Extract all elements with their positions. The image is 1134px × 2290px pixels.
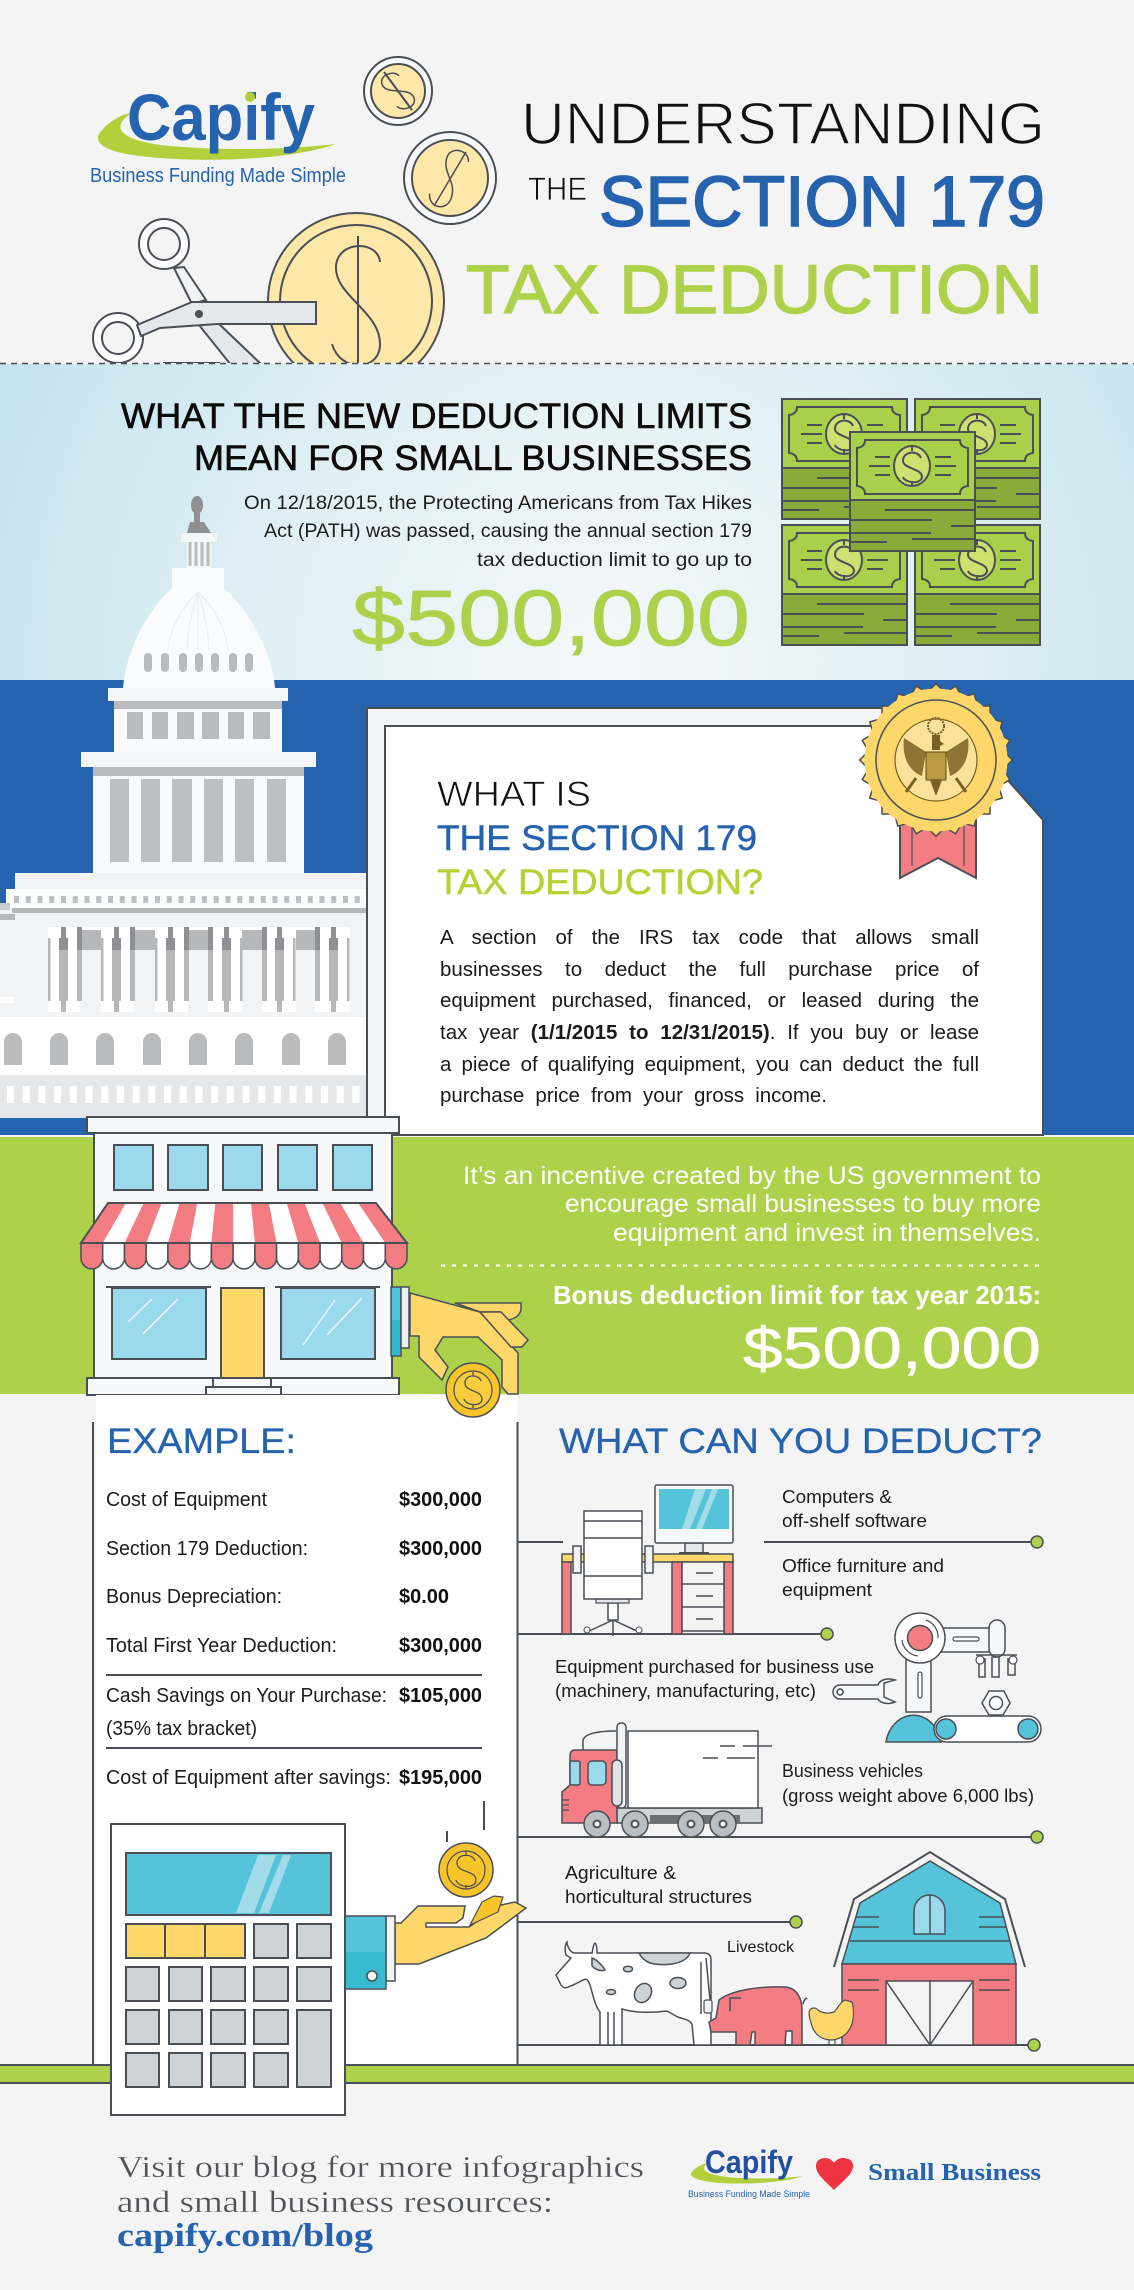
- item: business vehicles label: [782, 1760, 1034, 1806]
- icon: pig: [709, 1987, 807, 2045]
- panel: blue section 179 band: [0, 680, 1134, 1135]
- store lower windows: [106, 1287, 380, 1359]
- seal ribbon: [900, 815, 976, 878]
- icon: gold seal with ribbon: [860, 684, 1012, 878]
- icon: large coin being cut by scissors: [267, 212, 445, 363]
- table: example figures: [106, 1489, 482, 1789]
- row: cash savings: (35% tax bracket): [106, 1718, 257, 1740]
- text: incentive explanation: encourage small businesses to buy more: [565, 1190, 1041, 1218]
- footer: visit our blog text: [117, 2149, 644, 2254]
- store upper windows: [114, 1145, 372, 1190]
- calculator screen: [126, 1853, 331, 1915]
- item: equipment label: Equipment purchased for business use: [555, 1656, 874, 1677]
- figure: $500,000 bonus: $500,000: [743, 1316, 1041, 1381]
- text: PATH act summary: On 12/18/2015, the Protecting Americans from Tax Hikes: [244, 492, 752, 514]
- item: office furniture label: [782, 1555, 944, 1600]
- text: section 179 definition paragraph: businesses to deduct the full purchase price of: [440, 958, 979, 981]
- capitol: lantern: [181, 533, 217, 568]
- office chair: [573, 1511, 653, 1636]
- store base and steps: [87, 1378, 399, 1395]
- seal eagle emblem: [904, 718, 968, 796]
- text: PATH act summary: [244, 492, 752, 571]
- capitol: drum: [81, 688, 316, 873]
- money stack: center: [850, 432, 975, 551]
- barn wall: [842, 1964, 1016, 2045]
- logo: Capify: Capify: [127, 80, 315, 154]
- icon: scissors: [93, 219, 316, 365]
- footer: visit our blog text: and small business resources:: [117, 2184, 553, 2219]
- icon: calculator: [111, 1824, 345, 2115]
- text: section 179 definition paragraph: equipment purchased, financed, or leased during the: [440, 989, 979, 1012]
- row: cost of equipment: $300,000: [399, 1489, 482, 1511]
- item: office furniture label: Office furniture and: [782, 1555, 944, 1576]
- document inner page: [385, 726, 1043, 1135]
- marker dots: [790, 1536, 1043, 2051]
- barn roof: [842, 1861, 1016, 1964]
- footer: Capify logo: [688, 2144, 810, 2200]
- barn door: [886, 1981, 973, 2045]
- row: section 179 deduction: $300,000: [399, 1538, 482, 1560]
- green base bar: [0, 2065, 1134, 2083]
- row: total first year deduction: Total First Year Deduction:: [106, 1635, 337, 1657]
- money stack: bottom left: [782, 525, 907, 645]
- title: Understanding the Section 179 Tax Deduction: TAX DEDUCTION: [466, 251, 1043, 328]
- illustration: storefront: [81, 1117, 407, 1395]
- icon: robot arm with conveyor: [886, 1613, 1041, 1742]
- title: Understanding the Section 179 Tax Deduction: THE: [528, 171, 587, 207]
- calculator gray keys: [126, 1924, 331, 2087]
- row: total first year deduction: [106, 1635, 482, 1657]
- panel: light blue deduction limits band: [0, 364, 1134, 680]
- heading: what the new deduction limits mean: MEAN FOR SMALL BUSINESSES: [194, 439, 752, 478]
- item: agriculture label: horticultural structures: [565, 1886, 752, 1907]
- text: incentive explanation: [463, 1162, 1041, 1247]
- capitol: balustrade: [0, 1075, 367, 1118]
- leader lines: [517, 1542, 1037, 2045]
- text: section 179 definition paragraph: [440, 926, 979, 1107]
- title: Understanding the Section 179 Tax Deduction: [466, 91, 1045, 328]
- capitol: arched windows: [0, 1017, 367, 1075]
- panel: green incentive band: [0, 1137, 1134, 1394]
- heading: what is the section 179 tax deduction: [437, 775, 763, 902]
- text: incentive explanation: equipment and invest in themselves.: [613, 1219, 1041, 1247]
- item: computers label: Computers &: [782, 1486, 893, 1507]
- icon: desk with computer and chair: [562, 1485, 733, 1636]
- desk: [562, 1554, 733, 1634]
- row: cash savings: [106, 1685, 482, 1740]
- row: cost after savings: $195,000: [399, 1767, 482, 1789]
- item: business vehicles label: Business vehicles: [782, 1760, 923, 1781]
- panel: what is section 179 document: [367, 708, 1134, 1135]
- icon: cow: [556, 1942, 712, 2045]
- calculator yellow keys: [126, 1924, 245, 1958]
- text: section 179 definition paragraph: a piece of qualifying equipment, you can deduct the full: [440, 1053, 979, 1076]
- text: section 179 definition paragraph: A section of the IRS tax code that allows small: [440, 926, 979, 949]
- row: bonus depreciation: [106, 1586, 449, 1608]
- footer: visit our blog text: capify.com/blog: [117, 2218, 374, 2254]
- heading: what is the section 179 tax deduction: THE SECTION 179: [437, 819, 757, 858]
- icon: small falling coin: [364, 57, 432, 125]
- logo: Capify: [90, 80, 346, 187]
- panel: example white column: [93, 1395, 518, 2065]
- store cornice: [87, 1117, 399, 1133]
- heading: what the new deduction limits mean: WHAT THE NEW DEDUCTION LIMITS: [121, 397, 752, 436]
- item: computers label: off-shelf software: [782, 1510, 927, 1531]
- capitol: lower building wall: [0, 873, 367, 1017]
- capitol: colonnade: [48, 927, 350, 1012]
- figure: $500,000 limit: $500,000: [352, 573, 750, 662]
- icon: stacks of money: [782, 399, 1040, 645]
- heading: what is the section 179 tax deduction: TAX DEDUCTION?: [437, 863, 763, 902]
- money stack: top right: [915, 399, 1040, 519]
- text: section 179 definition paragraph: tax year (1/1/2015 to 12/31/2015). If you buy or lease: [440, 1021, 979, 1044]
- footer: visit our blog text: Visit our blog for more infographics: [117, 2149, 644, 2184]
- seal body: [860, 684, 1012, 836]
- illustration: US Capitol building: [0, 496, 367, 1118]
- row: cash savings: Cash Savings on Your Purchase:: [106, 1685, 387, 1707]
- text: PATH act summary: Act (PATH) was passed, causing the annual section 179: [264, 520, 752, 542]
- item: equipment label: (machinery, manufacturing, etc): [555, 1680, 816, 1701]
- text: PATH act summary: tax deduction limit to go up to: [477, 549, 752, 571]
- money stack: bottom right: [915, 525, 1040, 645]
- icon: chicken: [809, 2000, 854, 2045]
- store awning: [81, 1203, 407, 1269]
- monitor: [655, 1485, 733, 1553]
- capitol: finial: [187, 496, 211, 533]
- icon: hand with coin: [345, 1801, 526, 1989]
- row: cost of equipment: [106, 1489, 482, 1511]
- money stack: top left: [782, 399, 907, 519]
- barn roof outline: [834, 1852, 1025, 1967]
- barn window: [914, 1895, 945, 1934]
- store body: [94, 1133, 392, 1378]
- dashed divider: [0, 362, 1134, 364]
- heading: what is the section 179 tax deduction: WHAT IS: [437, 775, 591, 814]
- item: office furniture label: equipment: [782, 1579, 872, 1600]
- icon: heart: [816, 2158, 853, 2190]
- footer: small business: Small Business: [868, 2160, 1041, 2186]
- item: agriculture label: [565, 1862, 752, 1907]
- icon: barn: [834, 1852, 1025, 2045]
- logo: Capify: Business Funding Made Simple: [90, 165, 346, 187]
- title: Understanding the Section 179 Tax Deduction: SECTION 179: [599, 163, 1045, 242]
- item: computers label: [782, 1486, 927, 1531]
- icon: delivery truck: [562, 1723, 772, 1837]
- footer: Capify logo: Business Funding Made Simple: [688, 2189, 810, 2200]
- capitol: dome: [123, 568, 275, 688]
- row: bonus depreciation: $0.00: [399, 1586, 449, 1608]
- row: section 179 deduction: Section 179 Deduction:: [106, 1538, 308, 1560]
- heading: what the new deduction limits mean: [121, 397, 752, 478]
- row: total first year deduction: $300,000: [399, 1635, 482, 1657]
- icon: wrench: [833, 1679, 895, 1703]
- row: section 179 deduction: [106, 1538, 482, 1560]
- row: cost of equipment: Cost of Equipment: [106, 1489, 267, 1511]
- document outer page: [367, 708, 1043, 1135]
- icon: medium falling coin: [404, 132, 496, 224]
- icon: hand dropping coin: [391, 1287, 528, 1417]
- text: bonus deduction limit: Bonus deduction limit for tax year 2015:: [553, 1280, 1041, 1310]
- footer: Capify logo: Capify: [705, 2144, 793, 2180]
- store door: [221, 1288, 264, 1378]
- row: cash savings: $105,000: [399, 1685, 482, 1707]
- item: agriculture label: Agriculture &: [565, 1862, 677, 1883]
- row: cost after savings: Cost of Equipment after savings:: [106, 1767, 391, 1789]
- item: business vehicles label: (gross weight above 6,000 lbs): [782, 1785, 1034, 1806]
- text: incentive explanation: It’s an incentive created by the US government to: [463, 1162, 1041, 1190]
- title: Understanding the Section 179 Tax Deduction: UNDERSTANDING: [521, 91, 1045, 157]
- row: bonus depreciation: Bonus Depreciation:: [106, 1586, 282, 1608]
- heading: what can you deduct: WHAT CAN YOU DEDUCT?: [559, 1422, 1042, 1461]
- heading: example: EXAMPLE:: [107, 1422, 296, 1461]
- item: equipment label: [555, 1656, 874, 1701]
- text: section 179 definition paragraph: purchase price from your gross income.: [440, 1084, 827, 1107]
- item: livestock label: Livestock: [727, 1939, 795, 1956]
